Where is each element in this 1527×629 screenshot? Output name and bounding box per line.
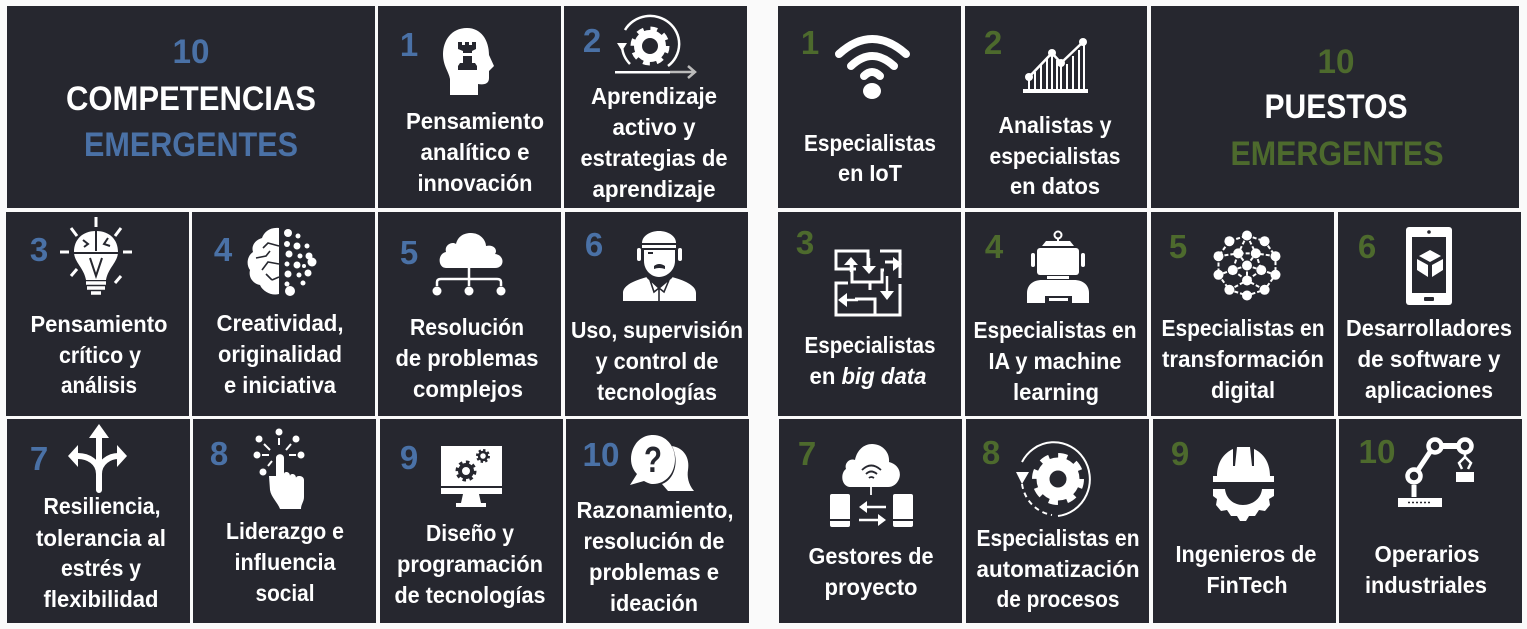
card: competencia 3: 3 (30, 231, 48, 268)
card: competencia 10: ? (644, 439, 662, 480)
card: puesto 6: de software y (1358, 346, 1501, 372)
card: puesto 2: en datos (1010, 173, 1100, 199)
card: puesto 8: de procesos (996, 586, 1120, 612)
card: competencia 1: 1 (400, 26, 418, 63)
card: puesto 7: Gestores de (808, 543, 934, 569)
card: puesto 7: proyecto (824, 574, 918, 600)
card: competencia 3 (6, 212, 189, 416)
card: competencia 1: analítico e (420, 139, 530, 165)
card: puesto 4: Especialistas en (974, 317, 1136, 343)
card: puesto 3: en big data (810, 363, 927, 389)
card: competencia 2: 2 (583, 22, 601, 59)
card: competencia 1: innovación (418, 170, 532, 196)
card: puesto 2: Analistas y (998, 112, 1112, 138)
card: puesto 4: 4 (985, 228, 1004, 265)
card: puesto 4: learning (1013, 379, 1099, 405)
card: puesto 6: aplicaciones (1365, 377, 1493, 403)
card: competencia 6: tecnologías (597, 379, 717, 405)
card: competencia 9 (380, 419, 563, 623)
card: puesto 10 (1339, 419, 1522, 623)
card: puesto 6: 6 (1358, 228, 1376, 265)
header: competencias: COMPETENCIAS (66, 80, 316, 118)
card: competencia 9: 9 (400, 439, 418, 476)
card: competencia 10: resolución de (584, 528, 724, 554)
card: competencia 10: Razonamiento, (576, 497, 734, 523)
card: puesto 4 (965, 212, 1147, 416)
card: competencia 8: Liderazgo e (226, 518, 344, 544)
card: puesto 9: FinTech (1206, 572, 1288, 598)
card: puesto 9 (1153, 419, 1336, 623)
card: puesto 2 (965, 6, 1147, 208)
card: competencia 8 (193, 419, 376, 623)
card: puesto 10: 10 (1358, 433, 1396, 470)
card: competencia 10: problemas e (589, 559, 719, 585)
card: competencia 3: crítico y (59, 342, 141, 368)
card: competencia 1: Pensamiento (406, 108, 544, 134)
card: puesto 7: 7 (798, 435, 816, 472)
card: competencia 7 (7, 419, 190, 623)
card: competencia 2: estrategias de (580, 145, 728, 171)
card: puesto 5: 5 (1169, 228, 1187, 265)
card: competencia 7: estrés y (61, 555, 141, 581)
card: competencia 7: flexibilidad (44, 586, 158, 612)
card: puesto 6 (1338, 212, 1521, 416)
card: competencia 9: programación (397, 551, 543, 577)
header: puestos: 10 (1318, 43, 1354, 81)
card: competencia 5: Resolución (410, 314, 524, 340)
card: competencia 5: 5 (400, 234, 418, 271)
card: competencia 2: activo y (612, 114, 696, 140)
card: puesto 8: 8 (982, 434, 1000, 471)
card: puesto 10: Operarios (1374, 541, 1480, 567)
card: puesto 9: 9 (1171, 435, 1189, 472)
card: competencia 8: social (256, 580, 314, 606)
card: competencia 2: aprendizaje (592, 176, 716, 202)
header: competencias (7, 6, 375, 208)
card: competencia 7: Resiliencia, (44, 493, 160, 519)
card: competencia 6 (565, 212, 748, 416)
card: competencia 9: de tecnologías (394, 582, 546, 608)
card: puesto 7 (779, 419, 962, 623)
card: competencia 4: e iniciativa (224, 372, 336, 398)
card: puesto 3: Especialistas (804, 332, 936, 358)
card: competencia 8: influencia (234, 549, 336, 575)
card: puesto 6: Desarrolladores (1346, 315, 1512, 341)
card: competencia 6: 6 (585, 226, 603, 263)
card: puesto 5: Especialistas en (1162, 315, 1324, 341)
card: competencia 6: y control de (596, 348, 718, 374)
card: puesto 8: automatización (976, 556, 1140, 582)
card: competencia 7: tolerancia al (36, 525, 166, 551)
card: competencia 5: de problemas (396, 345, 538, 371)
card: competencia 4: Creatividad, (216, 310, 344, 336)
card: puesto 5: digital (1211, 377, 1275, 403)
card: puesto 2: 2 (984, 24, 1002, 61)
header: competencias: EMERGENTES (84, 126, 298, 164)
card: puesto 9: Ingenieros de (1176, 541, 1316, 567)
card: competencia 6: Uso, supervisión (571, 317, 743, 343)
card: competencia 2: Aprendizaje (591, 83, 717, 109)
card: competencia 2 (564, 6, 747, 208)
card: puesto 1: en IoT (838, 160, 902, 186)
card: puesto 4: IA y machine (988, 348, 1122, 374)
card: puesto 3 (778, 212, 961, 416)
card: competencia 3: análisis (61, 372, 137, 398)
card: puesto 1: Especialistas (804, 130, 936, 156)
card: puesto 3: 3 (796, 224, 814, 261)
card: puesto 1: 1 (801, 24, 819, 61)
header: puestos (1151, 6, 1519, 208)
card: competencia 4 (192, 212, 375, 416)
card: competencia 8: 8 (210, 435, 228, 472)
card: competencia 5 (378, 212, 561, 416)
card: competencia 10: 10 (582, 436, 620, 473)
panel: puestos emergentes (778, 6, 1522, 623)
card: competencia 10: ideación (610, 590, 698, 616)
header: competencias: 10 (172, 33, 210, 71)
card: puesto 2: especialistas (990, 143, 1120, 169)
card: competencia 5: complejos (413, 376, 523, 402)
card: puesto 8: Especialistas en (976, 525, 1140, 551)
card: puesto 1 (778, 6, 961, 208)
card: competencia 3: Pensamiento (30, 311, 168, 337)
header: puestos: PUESTOS (1264, 88, 1408, 126)
card: competencia 4: 4 (214, 231, 233, 268)
card: puesto 10: industriales (1365, 572, 1487, 598)
card: competencia 10 (566, 419, 749, 623)
card: puesto 8 (966, 419, 1149, 623)
card: competencia 7: 7 (30, 440, 48, 477)
panel: competencias emergentes (6, 6, 749, 623)
card: competencia 4: originalidad (218, 341, 342, 367)
card: puesto 5: transformación (1162, 346, 1324, 372)
card: puesto 5 (1151, 212, 1334, 416)
card: competencia 9: Diseño y (426, 520, 514, 546)
card: competencia 1 (378, 6, 561, 208)
header: puestos: EMERGENTES (1230, 135, 1444, 173)
